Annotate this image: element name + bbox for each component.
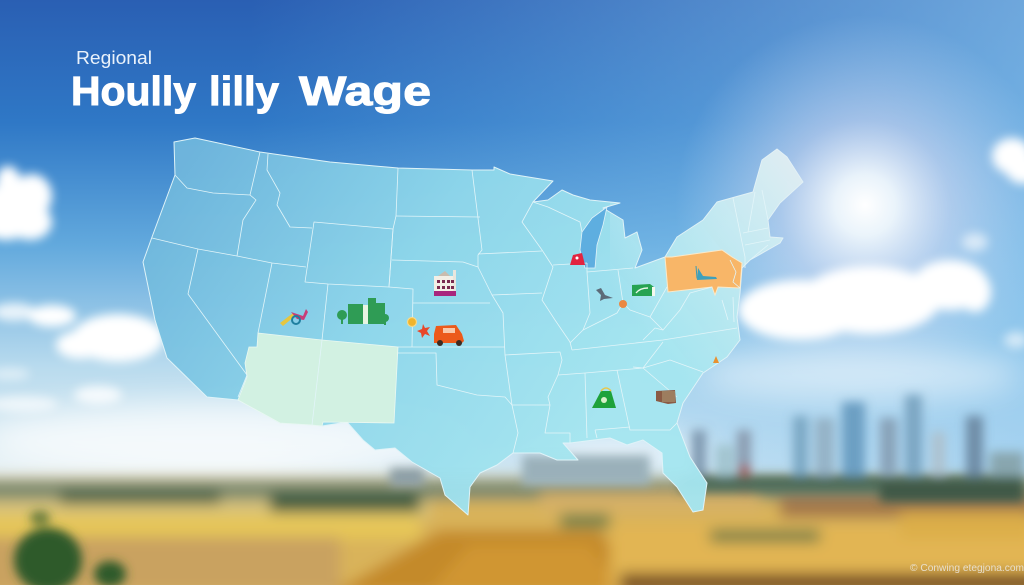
highlighted region: Pennsylvania bbox=[665, 250, 742, 295]
soft haze bbox=[0, 349, 1020, 478]
main title: Wage bbox=[299, 68, 431, 114]
icon: small triangle bbox=[713, 356, 719, 363]
icon: orange leaf bbox=[619, 300, 627, 308]
icon: green banknote bbox=[632, 284, 655, 296]
title block bbox=[71, 47, 431, 114]
fields bbox=[0, 478, 1024, 585]
main title bbox=[71, 68, 431, 114]
state borders bbox=[152, 152, 770, 453]
icon: grey bird bbox=[596, 288, 613, 301]
subtitle: Regional bbox=[76, 47, 152, 68]
icon: red star bbox=[417, 324, 430, 338]
skyline bbox=[390, 395, 1024, 502]
main title: lilly bbox=[209, 68, 279, 114]
icon: Utah tool bbox=[280, 309, 308, 326]
icon: Colorado green city buildings bbox=[337, 298, 389, 325]
map icons bbox=[280, 253, 719, 408]
land mass bbox=[143, 138, 803, 515]
icon: Nebraska building bbox=[434, 270, 456, 296]
icon: orange van bbox=[434, 325, 464, 346]
highlighted region: Arizona and New Mexico bbox=[238, 333, 398, 426]
main title: Hoully bbox=[71, 68, 196, 114]
icon: gold coin bbox=[408, 318, 416, 326]
icon: Pennsylvania chart bbox=[696, 266, 717, 280]
icon: red bag bbox=[570, 253, 585, 265]
clouds bbox=[0, 138, 1024, 412]
trees bbox=[14, 511, 126, 585]
icon: green money bag bbox=[592, 388, 616, 408]
icon: brown case bbox=[656, 390, 676, 404]
map of the United States bbox=[143, 138, 810, 515]
Lake Michigan bbox=[580, 207, 607, 268]
footer credit: © Conwing etegjona.com bbox=[910, 563, 1024, 574]
